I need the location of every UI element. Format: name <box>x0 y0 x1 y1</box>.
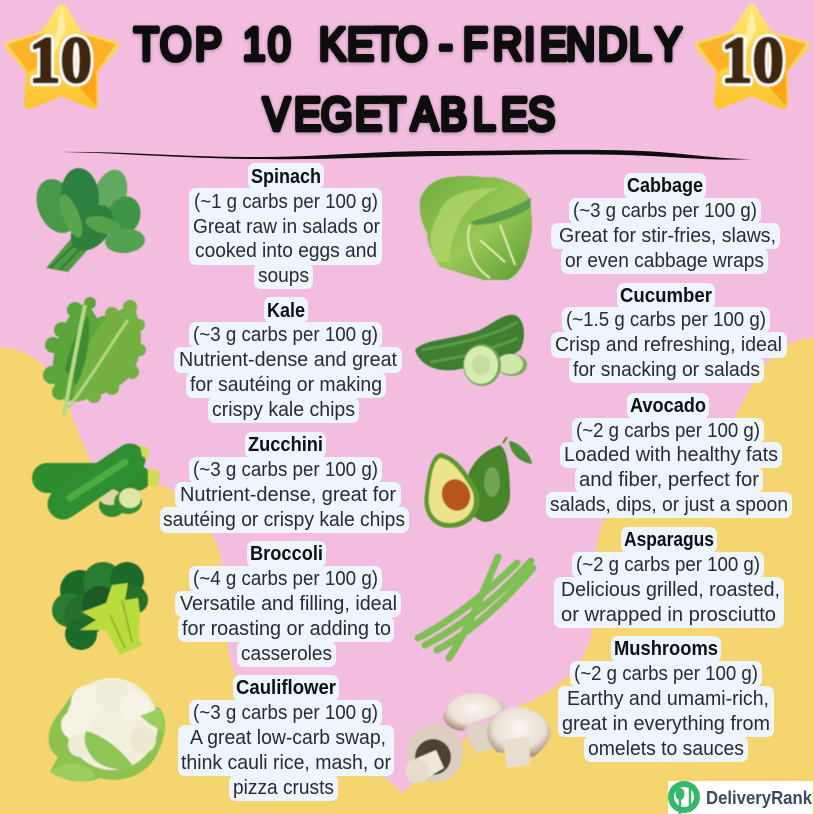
text block: mushrooms: (~2 g carbs per 100 g) <box>574 663 758 685</box>
text block: asparagus <box>554 527 784 628</box>
text block: avocado: Avocado <box>630 395 706 417</box>
text block: avocado: (~2 g carbs per 100 g) <box>576 420 760 442</box>
icon: star right <box>698 6 806 106</box>
text block: zucchini: Nutrient-dense, great for <box>180 484 396 506</box>
text block: spinach: Great raw in salads or <box>193 216 380 238</box>
text block: cucumber: Crisp and refreshing, ideal <box>555 334 782 356</box>
icon: kale <box>43 297 146 416</box>
text block: cauliflower: Cauliflower <box>236 677 336 699</box>
text block: cabbage: Great for stir-fries, slaws, <box>559 225 776 247</box>
text block: kale: Nutrient-dense and great <box>179 349 397 371</box>
title: 10 <box>243 20 290 71</box>
text block: kale: crispy kale chips <box>212 399 355 421</box>
text block: avocado: and fiber, perfect for <box>579 469 759 491</box>
text block: broccoli: casseroles <box>241 643 332 665</box>
icon: star left: 10 <box>29 24 92 97</box>
icon: cabbage <box>420 176 532 280</box>
text block: spinach <box>189 163 382 289</box>
icon: asparagus <box>418 557 533 658</box>
text block: broccoli: Versatile and filling, ideal <box>180 593 397 615</box>
text block: cabbage: (~3 g carbs per 100 g) <box>573 200 757 222</box>
yellow background shape <box>0 338 814 814</box>
text block: cauliflower: pizza crusts <box>233 777 334 799</box>
title <box>134 20 682 141</box>
text block: asparagus: or wrapped in prosciutto <box>561 604 776 626</box>
text block: mushrooms: Mushrooms <box>614 638 718 660</box>
text block: kale: (~3 g carbs per 100 g) <box>193 324 378 346</box>
text block: asparagus: (~2 g carbs per 100 g) <box>576 554 760 576</box>
text block: kale: Kale <box>267 300 305 322</box>
text block: avocado <box>546 393 792 518</box>
icon: star left: 10 <box>29 24 92 97</box>
text block: cucumber <box>551 283 787 383</box>
icon: cucumber <box>415 315 527 386</box>
text block: avocado: Loaded with healthy fats <box>564 444 778 466</box>
text block: spinach: cooked into eggs and <box>195 240 377 262</box>
text block: zucchini <box>160 432 409 533</box>
text block: cabbage: or even cabbage wraps <box>565 250 764 272</box>
icon: zucchini <box>47 445 160 517</box>
icon: cauliflower <box>48 678 165 781</box>
text block: cauliflower <box>178 675 394 801</box>
text block: broccoli: Broccoli <box>250 543 323 565</box>
text block: kale: for sautéing or making <box>190 374 382 396</box>
text block: mushrooms: Earthy and umami-rich, <box>567 688 769 710</box>
text block: spinach: Spinach <box>251 166 321 188</box>
icon: avocado <box>424 437 532 528</box>
title: KETO-FRIENDLY <box>319 20 682 71</box>
text block: cauliflower: think cauli rice, mash, or <box>181 752 391 774</box>
text block: broccoli: for roasting or adding to <box>182 618 391 640</box>
icon: mushrooms <box>405 693 551 783</box>
title: VEGETABLES <box>263 90 555 141</box>
text block: kale <box>174 297 402 423</box>
icon: star right: 10 <box>721 24 784 97</box>
text block: cauliflower: (~3 g carbs per 100 g) <box>193 702 378 724</box>
text block: spinach: soups <box>258 265 309 287</box>
icon: spinach <box>29 165 146 272</box>
logo: DeliveryRank <box>668 781 813 814</box>
text block: mushrooms <box>558 636 774 762</box>
text block: broccoli: (~4 g carbs per 100 g) <box>193 568 378 590</box>
icon: star right: 10 <box>721 24 784 97</box>
text block: cucumber: (~1.5 g carbs per 100 g) <box>566 309 766 331</box>
title: TOP <box>134 20 222 71</box>
text block: asparagus: Asparagus <box>624 529 714 551</box>
text block: mushrooms: omelets to sauces <box>588 738 744 760</box>
text block: broccoli <box>175 541 401 667</box>
divider swoosh <box>62 150 752 160</box>
text block: zucchini: sautéing or crispy kale chips <box>163 509 405 531</box>
text block: zucchini: Zucchini <box>248 434 323 456</box>
text block: cucumber: Cucumber <box>620 285 712 307</box>
text block: cucumber: for snacking or salads <box>573 359 760 381</box>
icon: star left <box>8 6 116 106</box>
text block: cabbage: Cabbage <box>627 175 703 197</box>
text block: asparagus: Delicious grilled, roasted, <box>561 579 780 601</box>
text block: cauliflower: A great low-carb swap, <box>190 727 386 749</box>
text block: mushrooms: great in everything from <box>562 713 770 735</box>
text block: zucchini: (~3 g carbs per 100 g) <box>193 459 378 481</box>
icon: broccoli <box>52 562 148 655</box>
text block: cabbage <box>551 173 780 274</box>
text block: spinach: (~1 g carbs per 100 g) <box>194 191 378 213</box>
text block: avocado: salads, dips, or just a spoon <box>550 494 788 516</box>
